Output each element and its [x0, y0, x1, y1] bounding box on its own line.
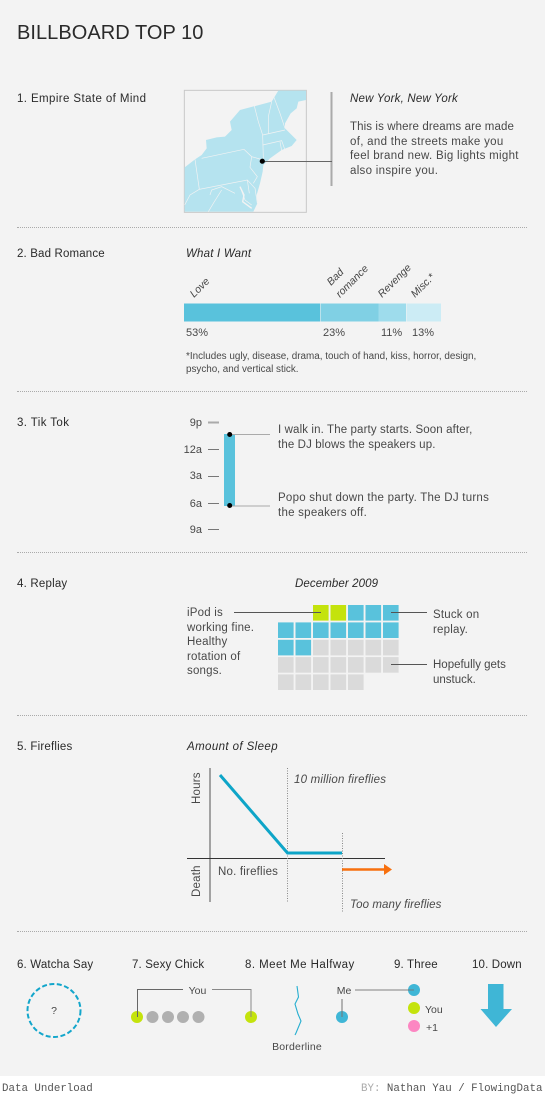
stacked bar chart: Bad [325, 266, 347, 288]
line chart of sleep vs fireflies: Hours [191, 772, 203, 804]
timeline chart: 12a [184, 444, 203, 456]
ipod annotation: iPod is [187, 607, 223, 619]
new york callout line and marker [260, 92, 332, 186]
icon: dashed question circle [28, 984, 80, 1037]
dot: meet me halfway: Me [337, 985, 351, 997]
stuck annotation: Stuck on [433, 609, 479, 621]
chart title: What I Want [186, 248, 251, 260]
stuck annotation [433, 609, 479, 636]
dots: sexy chick [131, 985, 257, 1023]
chart title: Amount of Sleep [187, 741, 278, 753]
section 7 heading: 7. Sexy Chick [132, 959, 204, 971]
new york caption text: feel brand new. Big lights might [350, 150, 519, 162]
footer credit: BY: Nathan Yau / FlowingData [361, 1083, 542, 1095]
new york caption text: also inspire you. [350, 164, 438, 176]
section 6 heading: 6. Watcha Say [17, 959, 93, 971]
section 1 heading: 1. Empire State of Mind [17, 93, 146, 105]
timeline chart: 9p [190, 417, 202, 429]
timeline chart [184, 417, 270, 536]
stacked bar chart [184, 262, 441, 339]
timeline chart: 3a [190, 470, 203, 482]
section 4 heading: 4. Replay [17, 578, 67, 590]
ipod annotation: songs. [187, 665, 222, 677]
timeline chart: 9a [190, 524, 203, 536]
new york caption title: New York, New York [350, 93, 458, 105]
ipod annotation: rotation of [187, 650, 240, 662]
new york caption text: of, and the streets make you [350, 136, 504, 148]
dots: three: +1 [426, 1022, 438, 1034]
line chart of sleep vs fireflies: Death [191, 865, 203, 897]
new york caption text: This is where dreams are made [350, 121, 514, 133]
line chart of sleep vs fireflies: 10 million fireflies [294, 774, 386, 786]
stuck annotation: replay. [433, 624, 468, 636]
stacked bar chart: 23% [323, 327, 345, 339]
dots: sexy chick: You [189, 985, 207, 997]
stacked bar chart: 53% [186, 327, 208, 339]
ipod annotation: working fine. [187, 622, 254, 634]
stacked bar chart: 13% [412, 327, 434, 339]
party ends annotation: the speakers off. [278, 506, 367, 518]
new york caption text [350, 121, 519, 176]
unstuck annotation: Hopefully gets [433, 659, 506, 671]
section 5 heading: 5. Fireflies [17, 741, 72, 753]
unstuck annotation: unstuck. [433, 674, 476, 686]
map of the northeast United States [184, 90, 307, 213]
stacked bar chart: Revenge [376, 262, 414, 300]
footer left text: Data Underload [2, 1083, 93, 1095]
stacked bar chart: Love [188, 275, 212, 300]
footer [0, 1076, 545, 1099]
arrow: down [480, 984, 512, 1027]
section 9 heading: 9. Three [394, 959, 438, 971]
section 2 heading: 2. Bad Romance [17, 248, 105, 260]
unstuck annotation [433, 659, 506, 686]
party starts annotation: I walk in. The party starts. Soon after, [278, 424, 472, 436]
dots: three [355, 984, 443, 1034]
footnote: *Includes ugly, disease, drama, touch of hand, kiss, horror, design, [186, 351, 476, 362]
section 3 heading: 3. Tik Tok [17, 417, 69, 429]
party ends annotation [278, 492, 489, 518]
icon: dashed question circle: ? [51, 1005, 57, 1017]
section 10 heading: 10. Down [472, 959, 522, 971]
line chart of sleep vs fireflies: Too many fireflies [350, 899, 442, 911]
party starts annotation: the DJ blows the speakers up. [278, 438, 436, 450]
footnote [186, 351, 476, 374]
stacked bar chart: romance [334, 263, 371, 300]
borderline squiggle [272, 986, 322, 1053]
line chart of sleep vs fireflies: No. fireflies [218, 866, 278, 878]
ipod annotation [187, 607, 254, 677]
stacked bar chart: Misc.* [409, 271, 438, 300]
calendar grid [234, 605, 427, 690]
calendar title: December 2009 [295, 578, 378, 590]
dot: meet me halfway [336, 985, 351, 1023]
footnote: psycho, and vertical stick. [186, 364, 299, 374]
timeline chart: 6a [190, 498, 203, 510]
borderline squiggle: Borderline [272, 1041, 322, 1053]
party ends annotation: Popo shut down the party. The DJ turns [278, 492, 489, 504]
title: BILLBOARD TOP 10 [17, 22, 203, 44]
stacked bar chart: 11% [381, 327, 402, 339]
party starts annotation [278, 424, 472, 450]
ipod annotation: Healthy [187, 636, 227, 648]
section 8 heading: 8. Meet Me Halfway [245, 959, 355, 971]
dots: three: You [425, 1004, 443, 1016]
